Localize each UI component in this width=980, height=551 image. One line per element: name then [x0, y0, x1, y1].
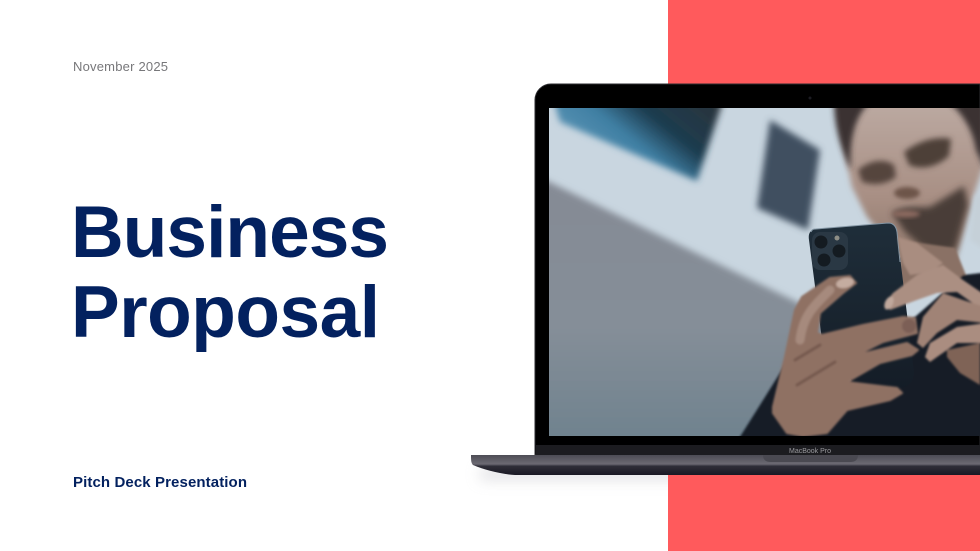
right hand	[882, 237, 980, 385]
model label: MacBook Pro	[789, 448, 831, 455]
dark window	[757, 120, 820, 230]
beard	[892, 186, 968, 254]
title: Business	[71, 192, 389, 273]
hair	[834, 100, 980, 170]
red background panel	[668, 0, 980, 551]
date label: November 2025	[73, 59, 168, 74]
neck and torso	[738, 240, 980, 440]
knuckle shading	[800, 290, 830, 340]
subtitle: Pitch Deck Presentation	[73, 474, 247, 491]
photo backdrop: pale building beam	[549, 108, 980, 380]
webcam	[808, 96, 812, 100]
left thumb nail	[835, 276, 855, 290]
man's head	[834, 100, 980, 262]
phone top edge highlight	[811, 223, 900, 262]
grey wall	[549, 178, 822, 436]
chin panel	[536, 445, 980, 455]
laptop shadow	[480, 468, 690, 480]
hand veins	[795, 345, 835, 385]
pale background right of the neck	[973, 196, 974, 201]
nose shadow	[894, 187, 920, 199]
laptop lid bezel	[535, 84, 980, 455]
laptop mockup	[471, 84, 980, 475]
title: Proposal	[71, 272, 380, 353]
lips	[892, 210, 920, 218]
right thumb nail	[882, 296, 894, 311]
eyes and brows	[858, 138, 951, 184]
blue window	[553, 98, 724, 181]
screen photo: man looking at phone	[535, 98, 980, 450]
face shape	[838, 100, 980, 262]
left hand	[773, 276, 918, 436]
phone	[808, 222, 908, 380]
laptop base	[471, 455, 980, 475]
finger nail	[902, 319, 916, 333]
camera lenses	[812, 232, 848, 270]
trackpad notch	[763, 455, 858, 462]
title	[71, 192, 389, 353]
